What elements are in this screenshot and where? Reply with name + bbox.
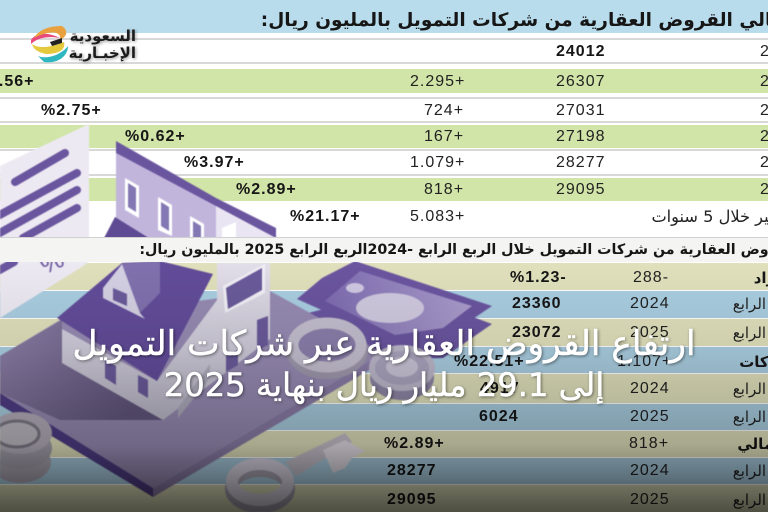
bottom table: figures: %1.23- — [510, 269, 567, 286]
top table: figures: 26307 — [556, 73, 606, 90]
logo: swirl emblem and channel name: الإخبـارية — [69, 44, 136, 62]
top table: figures: 5.083+ — [410, 208, 465, 225]
top table: figures: 1.079+ — [410, 154, 465, 171]
top table: figures: %21.17+ — [290, 208, 361, 225]
top table: figures: 724+ — [424, 102, 464, 119]
top table: figures: 2.295+ — [410, 73, 465, 90]
top table: figures: %2.75+ — [41, 102, 102, 119]
bottom table: figures: %22.51+ — [454, 353, 525, 370]
bottom table: figures: 288- — [633, 269, 669, 286]
bottom table: figures: 28277 — [387, 462, 436, 479]
bottom table: figures: 2025 — [630, 324, 670, 341]
bottom table: figures: 4917 — [480, 380, 520, 397]
main title — [72, 324, 696, 407]
bottom table: figures: 818+ — [629, 435, 669, 452]
logo: swirl emblem and channel name: السعودية — [70, 27, 136, 45]
heading: bottom table — [0, 237, 768, 262]
bottom table: figures: 23072 — [512, 324, 562, 341]
bottom table: figures: 23360 — [512, 295, 562, 312]
dark gradient overlay — [0, 262, 768, 512]
main title: ارتفاع القروض العقارية عبر شركات التمويل — [72, 324, 696, 364]
platform — [0, 291, 383, 497]
document sheet: % — [35, 243, 69, 280]
bottom table: figures: 1.107+ — [617, 353, 672, 370]
bottom table background bands — [0, 262, 768, 512]
top table: figures: 24012 — [556, 43, 606, 60]
top table: figures: 818+ — [424, 181, 464, 198]
top table: figures: 27198 — [556, 128, 606, 145]
main title: إلى 29.1 مليار ريال بنهاية 2025 — [164, 366, 604, 404]
bottom table: figures: 2024 — [630, 462, 670, 479]
logo: swirl emblem and channel name — [31, 26, 138, 64]
key — [231, 433, 365, 507]
top table: figures: %0.62+ — [125, 128, 186, 145]
bottom table: figures: 2024 — [630, 295, 670, 312]
top table: figures: %3.97+ — [184, 154, 245, 171]
money notes — [297, 261, 492, 360]
coin stacks — [0, 323, 434, 483]
top table: figures: 167+ — [424, 128, 464, 145]
bottom table: figures — [384, 269, 768, 509]
bottom table: figures: 6024 — [479, 408, 519, 425]
bottom table: figures: 2025 — [630, 408, 670, 425]
bottom table: figures: %2.89+ — [384, 435, 445, 452]
top table: figures: %2.89+ — [236, 181, 297, 198]
top table: figures — [0, 43, 768, 226]
bottom table: figures: 2024 — [630, 380, 670, 397]
top table: figures: 28277 — [556, 154, 606, 171]
document sheet — [0, 124, 89, 318]
house — [57, 141, 276, 420]
bottom table: figures: 2025 — [630, 491, 670, 508]
top table: figures: 27031 — [556, 102, 606, 119]
top table: figures: 29095 — [556, 181, 606, 198]
top table background bands — [0, 0, 768, 237]
bottom table: figures: 29095 — [387, 491, 436, 508]
